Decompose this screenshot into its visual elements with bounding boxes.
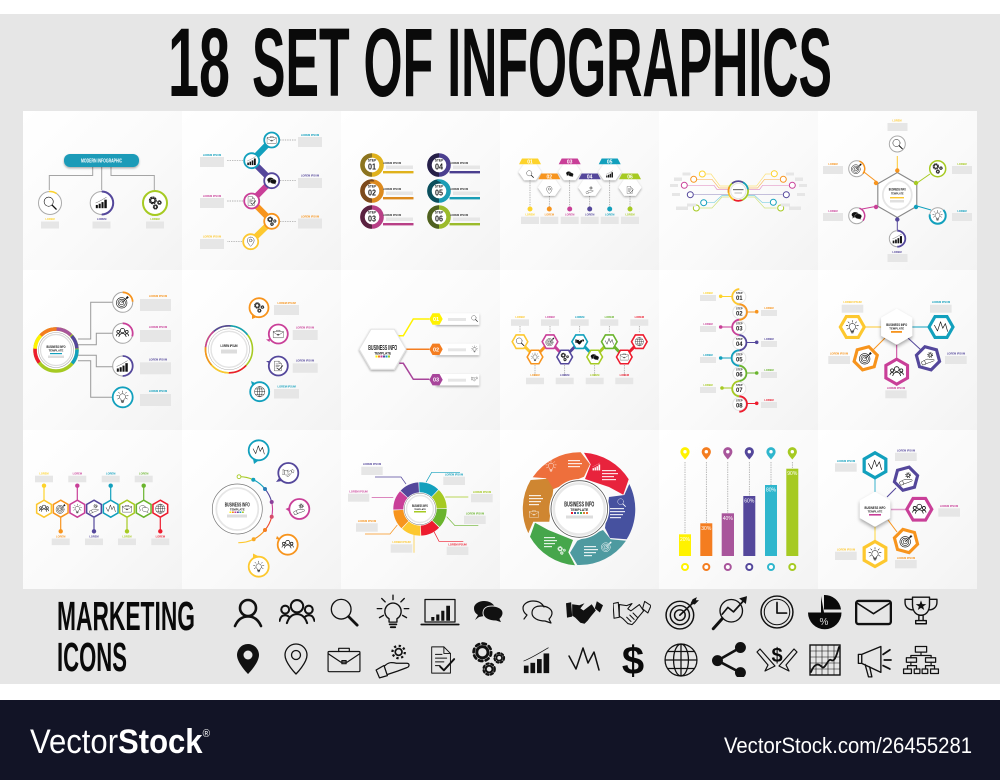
satellite circles bbox=[681, 171, 795, 211]
step 06: LOREM IPSUM bbox=[450, 213, 468, 217]
wave labels: LOREM bbox=[764, 306, 774, 310]
bar 20%: 20% bbox=[680, 537, 691, 543]
step 02: LOREM IPSUM bbox=[383, 187, 401, 191]
hex tab 01 bbox=[518, 158, 542, 224]
icon: solid pin bbox=[237, 644, 259, 674]
zigzag labels: LOREM bbox=[605, 315, 614, 319]
bar 90%: 90% bbox=[787, 471, 798, 477]
circuit text blocks bbox=[670, 172, 807, 210]
panel: hexagon hub with six nodes bbox=[823, 118, 972, 262]
zigzag labels: LOREM bbox=[545, 315, 555, 319]
icon: bar growth bbox=[524, 648, 549, 673]
icon: bulb bbox=[377, 595, 409, 627]
heading pill: MODERN INFOGRAPHIC bbox=[81, 158, 122, 164]
step 06 bbox=[430, 208, 480, 226]
chart node: LOREM bbox=[97, 217, 106, 221]
step 01: 01 bbox=[368, 162, 376, 171]
large hexagon: BUSINESS INFO bbox=[368, 345, 397, 352]
bar 30%: 30% bbox=[701, 526, 712, 532]
bubble: bulb bbox=[249, 554, 269, 577]
panel: ring with four branches bbox=[26, 292, 171, 407]
wave step text: STEP bbox=[736, 384, 743, 387]
zigzag labels: LOREM bbox=[560, 373, 569, 377]
step 01: STEP bbox=[368, 158, 377, 162]
panel: circuit ring diagram bbox=[670, 171, 807, 211]
step 02: 02 bbox=[368, 188, 376, 197]
panel tiles background bbox=[23, 111, 977, 589]
wheel centre: TEMPLATE bbox=[570, 507, 589, 512]
hex tab 05: LOREM bbox=[605, 212, 614, 216]
zigzag icons bbox=[516, 337, 644, 361]
icon: pie chart: % bbox=[820, 617, 829, 628]
zigzag labels: LOREM bbox=[635, 315, 644, 319]
step 04 bbox=[430, 156, 480, 174]
hub hexagon: BUSINESS INFO bbox=[889, 188, 906, 192]
wave labels: LOREM bbox=[703, 383, 713, 387]
hexagon: hand: LOREM IPSUM bbox=[947, 352, 965, 356]
satellite: target: LOREM bbox=[828, 162, 838, 166]
donut labels: LOREM IPSUM bbox=[448, 542, 467, 546]
chain labels: LOREM bbox=[56, 534, 65, 538]
wave labels: LOREM bbox=[703, 353, 713, 357]
icon: laptop bbox=[421, 600, 459, 624]
zigzag labels: LOREM bbox=[515, 315, 525, 319]
hub hexagon: TEMPLATE bbox=[891, 192, 904, 196]
bubble: doc: LOREM IPSUM bbox=[296, 358, 314, 362]
chain labels: LOREM IPSUM bbox=[301, 214, 319, 218]
segment: red bbox=[584, 453, 629, 495]
bar 60%: 60% bbox=[744, 498, 755, 504]
panel: white hexagon hub with five hexagons bbox=[828, 300, 967, 398]
wave step text bbox=[736, 292, 743, 409]
zigzag labels: LOREM bbox=[620, 373, 629, 377]
hexagon: target: LOREM IPSUM bbox=[830, 352, 848, 356]
wave step text: STEP bbox=[736, 353, 743, 356]
satellite: chart: LOREM bbox=[892, 250, 902, 254]
wave dots bbox=[719, 294, 758, 405]
central ring bbox=[724, 177, 752, 205]
icon: group bbox=[280, 600, 314, 623]
map pins bbox=[680, 447, 797, 460]
wave labels: LOREM bbox=[764, 368, 774, 372]
vectorstock logo: VectorStock bbox=[30, 723, 211, 761]
bar 40%: 40% bbox=[723, 516, 733, 522]
large hexagon: TEMPLATE bbox=[374, 352, 392, 356]
hub hexagon bbox=[878, 172, 917, 218]
step 01: LOREM IPSUM bbox=[383, 161, 401, 165]
icon: megaphone bbox=[858, 646, 891, 677]
panel: hexagon tabs timeline bbox=[518, 158, 642, 224]
vectorstock logo: ® bbox=[203, 728, 210, 740]
icon: chat bubbles bbox=[474, 601, 503, 623]
icon: dollar in hands bbox=[757, 645, 797, 671]
wave step text: 05 bbox=[736, 357, 743, 363]
marketing icons heading: MARKETING bbox=[57, 593, 195, 639]
chain labels: LOREM bbox=[39, 472, 49, 476]
panel: chain timeline bbox=[200, 132, 322, 249]
satellite: bulb bbox=[926, 204, 972, 227]
hex tab 05 bbox=[598, 158, 621, 224]
chain labels: LOREM IPSUM bbox=[203, 234, 221, 238]
chain hexagons bbox=[37, 500, 168, 517]
donut labels: LOREM IPSUM bbox=[445, 472, 463, 476]
satellite: chat bbox=[823, 205, 867, 226]
icon: mail bbox=[856, 601, 891, 624]
bubble: zigzag bbox=[249, 440, 269, 464]
donut centre: TEMPLATE bbox=[414, 508, 426, 511]
panel: eight segment donut bbox=[348, 462, 493, 555]
segment: amber bbox=[523, 479, 553, 533]
hex tab 05: 05 bbox=[607, 160, 613, 166]
hub hexagon: BUSINESS INFO bbox=[886, 322, 907, 327]
hexagon: bulb: LOREM IPSUM bbox=[843, 300, 862, 304]
zigzag labels bbox=[511, 315, 648, 384]
step 02 bbox=[362, 182, 414, 200]
satellite: bulb: LOREM bbox=[957, 209, 967, 213]
icon: clock bbox=[761, 596, 793, 628]
icon: outline pin bbox=[285, 644, 307, 674]
chain dots bbox=[42, 484, 162, 534]
branch: group bbox=[113, 323, 171, 343]
icon: document check bbox=[432, 647, 454, 673]
icon: gears bbox=[474, 643, 504, 675]
hexagon: hand: LOREM IPSUM bbox=[897, 448, 915, 452]
chain labels bbox=[200, 133, 322, 249]
central circle: BUSINESS INFO bbox=[225, 502, 250, 508]
segment: green bbox=[530, 523, 575, 565]
hub hexagon: TEMPLATE bbox=[868, 510, 883, 514]
chain icons bbox=[39, 504, 165, 513]
icon: org chart bbox=[904, 646, 938, 674]
zigzag labels: LOREM bbox=[590, 373, 599, 377]
bubble: hand bbox=[286, 499, 309, 519]
panel: hexagon zigzag timeline bbox=[511, 315, 648, 384]
donut labels: LOREM IPSUM bbox=[466, 512, 484, 516]
chain labels bbox=[35, 472, 169, 545]
satellite: gears bbox=[930, 161, 972, 177]
satellite: search bbox=[888, 118, 908, 152]
arc segments bbox=[238, 477, 273, 543]
arc nodes bbox=[237, 475, 274, 541]
wave step text: STEP bbox=[736, 369, 743, 372]
icon: dollar in hands: $ bbox=[771, 645, 783, 667]
donut labels: LOREM IPSUM bbox=[473, 490, 491, 494]
wave curve bbox=[732, 289, 747, 412]
image id: VectorStock.com/26455281 bbox=[724, 733, 972, 758]
step 06: 06 bbox=[435, 214, 443, 223]
segment: teal bbox=[570, 530, 626, 565]
hexagon: group: LOREM IPSUM bbox=[887, 386, 905, 390]
icon: search bbox=[331, 599, 357, 625]
panel: modern infographic tree bbox=[38, 154, 167, 228]
chain labels: LOREM bbox=[73, 472, 82, 476]
wave step text: STEP bbox=[736, 292, 743, 295]
icon row 2 bbox=[237, 639, 938, 683]
donut centre bbox=[404, 493, 436, 525]
hex tab 06 bbox=[618, 174, 642, 224]
panel: large hexagon with three tabs bbox=[359, 313, 479, 386]
wave step text: 04 bbox=[736, 342, 743, 348]
hex tab 04: 04 bbox=[587, 174, 593, 180]
branch: bars: LOREM IPSUM bbox=[149, 358, 167, 362]
step 01 bbox=[362, 156, 414, 174]
icon: handshake outline bbox=[613, 601, 651, 625]
hexagon: target: LOREM IPSUM bbox=[897, 556, 915, 560]
wave step text: 06 bbox=[736, 373, 743, 379]
chain labels: LOREM IPSUM bbox=[203, 194, 221, 198]
satellite: gears: LOREM bbox=[957, 162, 967, 166]
title: 18 bbox=[168, 8, 230, 117]
chain labels: LOREM IPSUM bbox=[301, 133, 319, 137]
panel: eight hexagon chain bbox=[35, 472, 169, 545]
hex tab 04: LOREM bbox=[585, 212, 594, 216]
wave step text: 02 bbox=[736, 311, 743, 317]
panel: percentage bar chart bbox=[679, 447, 798, 570]
icon: hand with gear bbox=[376, 646, 409, 678]
central multicolour ring bbox=[26, 320, 86, 380]
branch: target bbox=[113, 292, 171, 312]
marketing icons heading bbox=[57, 593, 195, 680]
hex tab 03: LOREM bbox=[565, 212, 574, 216]
icon: briefcase bbox=[328, 648, 360, 672]
step 04: STEP bbox=[435, 158, 444, 162]
hex tab 02 bbox=[538, 174, 561, 224]
satellite: search: LOREM bbox=[892, 118, 902, 122]
wave step text: STEP bbox=[736, 338, 743, 341]
wave step text: 08 bbox=[736, 403, 743, 409]
title bbox=[168, 8, 832, 117]
hub nodes bbox=[874, 168, 918, 222]
hex tab 03: 03 bbox=[567, 160, 573, 166]
hex tab 02: 02 bbox=[547, 174, 552, 180]
tab 03: 03 bbox=[433, 378, 439, 384]
donut labels: LOREM IPSUM bbox=[349, 490, 368, 494]
chain labels: LOREM bbox=[89, 534, 99, 538]
hex tab 03 bbox=[558, 158, 581, 224]
hexagon: group: LOREM IPSUM bbox=[940, 504, 958, 508]
hex tab 06: LOREM bbox=[625, 212, 635, 216]
large hexagon bbox=[359, 329, 406, 369]
chain labels: LOREM bbox=[106, 472, 115, 476]
central multicolour ring: TEMPLATE bbox=[49, 348, 64, 352]
step 05: LOREM IPSUM bbox=[450, 187, 468, 191]
wave labels bbox=[700, 291, 777, 408]
branch: target: LOREM IPSUM bbox=[149, 294, 167, 298]
icon: target bbox=[666, 597, 699, 629]
branch: bars bbox=[113, 356, 171, 376]
tab 01: 01 bbox=[433, 317, 439, 323]
zigzag hexagons bbox=[512, 335, 647, 364]
icon: share bbox=[712, 642, 746, 678]
bottom markers bbox=[682, 564, 795, 570]
branch: group: LOREM IPSUM bbox=[149, 325, 167, 329]
panel: ring with speech bubbles bbox=[196, 298, 318, 401]
donut labels: LOREM IPSUM bbox=[363, 462, 381, 466]
footer bar bbox=[0, 700, 1000, 780]
hex tab 06: 06 bbox=[627, 174, 633, 180]
segment: orange bbox=[533, 452, 590, 489]
wave step discs bbox=[733, 290, 746, 410]
icon: chat outlines bbox=[523, 601, 552, 623]
central ring: LOREM IPSUM bbox=[220, 344, 238, 348]
bubble: globe: LOREM IPSUM bbox=[278, 384, 296, 388]
step 05: 05 bbox=[435, 188, 443, 197]
hexagon: bulb: LOREM IPSUM bbox=[837, 548, 855, 552]
segment: blue bbox=[605, 484, 635, 539]
marketing icons heading: ICONS bbox=[57, 634, 127, 680]
tab 02: 02 bbox=[433, 347, 439, 353]
bubble: gears: LOREM IPSUM bbox=[278, 301, 296, 305]
wave step text: 01 bbox=[736, 296, 743, 302]
wheel icons bbox=[529, 460, 625, 554]
icon: pie chart bbox=[808, 595, 842, 629]
icon: zigzag bbox=[569, 648, 599, 670]
hex tab 04 bbox=[578, 174, 601, 224]
wave step text: 07 bbox=[736, 388, 743, 394]
step 04: LOREM IPSUM bbox=[450, 161, 468, 165]
wave labels: LOREM bbox=[703, 322, 713, 326]
icon row 1 bbox=[235, 595, 937, 629]
wheel centre bbox=[549, 479, 609, 539]
donut centre: BUSINESS INFO bbox=[412, 504, 428, 508]
icon: growth search bbox=[713, 596, 747, 629]
chain nodes bbox=[243, 132, 279, 249]
panel: arc timeline with bubbles bbox=[212, 440, 309, 577]
chain icons bbox=[247, 137, 276, 246]
wave step text: STEP bbox=[736, 307, 743, 310]
step 03: STEP bbox=[368, 210, 377, 214]
hex tab 02: LOREM bbox=[545, 212, 554, 216]
search node: LOREM bbox=[45, 217, 55, 221]
icon: person bbox=[235, 600, 261, 626]
hex tab 01: 01 bbox=[527, 160, 533, 166]
panel: large chevron wheel bbox=[523, 452, 635, 565]
central circle bbox=[212, 484, 262, 534]
central multicolour ring: BUSINESS INFO bbox=[46, 345, 66, 349]
bar 80%: 80% bbox=[766, 488, 777, 494]
branch: bulb: LOREM IPSUM bbox=[149, 389, 167, 393]
branch: bulb bbox=[113, 387, 171, 407]
chain labels: LOREM IPSUM bbox=[301, 174, 319, 178]
wave labels: LOREM bbox=[764, 398, 774, 402]
hub hexagon: BUSINESS INFO bbox=[864, 505, 886, 510]
donut labels: LOREM IPSUM bbox=[358, 519, 376, 523]
icon: dollar: $ bbox=[622, 639, 644, 683]
satellite: chat: LOREM bbox=[828, 209, 838, 213]
hexagon: zigzag: LOREM IPSUM bbox=[837, 459, 855, 463]
donut labels: LOREM IPSUM bbox=[392, 540, 411, 544]
chain labels: LOREM IPSUM bbox=[203, 153, 221, 157]
central circle: TEMPLATE bbox=[230, 508, 245, 512]
panel: six step rings bbox=[362, 156, 480, 226]
chain labels: LOREM bbox=[139, 472, 148, 476]
panel: eight step wave bbox=[700, 289, 777, 412]
icon: line graph bbox=[810, 645, 840, 675]
step 06: STEP bbox=[435, 210, 444, 214]
chain labels: LOREM bbox=[156, 534, 165, 538]
satellite: chart bbox=[888, 231, 908, 262]
icon: handshake solid bbox=[566, 601, 603, 624]
icon: globe bbox=[665, 644, 697, 676]
wave step text: STEP bbox=[736, 399, 743, 402]
step 03: 03 bbox=[368, 214, 376, 223]
wheel centre: BUSINESS INFO bbox=[564, 502, 595, 508]
step 05: STEP bbox=[435, 184, 444, 188]
bubble: group bbox=[276, 535, 298, 555]
hub hexagon bbox=[860, 492, 890, 527]
chain labels: LOREM bbox=[122, 534, 132, 538]
step 04: 04 bbox=[435, 162, 443, 171]
zigzag labels: LOREM bbox=[530, 373, 540, 377]
wave step text: STEP bbox=[736, 323, 743, 326]
step 02: STEP bbox=[368, 184, 377, 188]
hub hexagon bbox=[881, 309, 912, 345]
gears node: LOREM bbox=[150, 217, 160, 221]
hub hexagon: TEMPLATE bbox=[889, 326, 904, 330]
hexagon: zigzag: LOREM IPSUM bbox=[932, 300, 950, 304]
step 03 bbox=[362, 208, 414, 226]
wave labels: LOREM bbox=[703, 291, 713, 295]
hex tab 01: LOREM bbox=[525, 212, 535, 216]
step 03: LOREM IPSUM bbox=[383, 213, 401, 217]
bubble: shake bbox=[276, 463, 298, 483]
step 05 bbox=[430, 182, 480, 200]
zigzag labels: LOREM bbox=[575, 315, 584, 319]
panel: hexagon hub with radial hexagons bbox=[835, 448, 960, 568]
icon: trophy bbox=[905, 597, 937, 624]
satellite: target bbox=[823, 158, 867, 179]
wave labels: LOREM bbox=[764, 337, 774, 341]
bubble: case: LOREM IPSUM bbox=[296, 326, 314, 330]
wave step text: 03 bbox=[736, 327, 743, 333]
donut ring bbox=[398, 487, 442, 531]
donut labels bbox=[348, 462, 493, 555]
